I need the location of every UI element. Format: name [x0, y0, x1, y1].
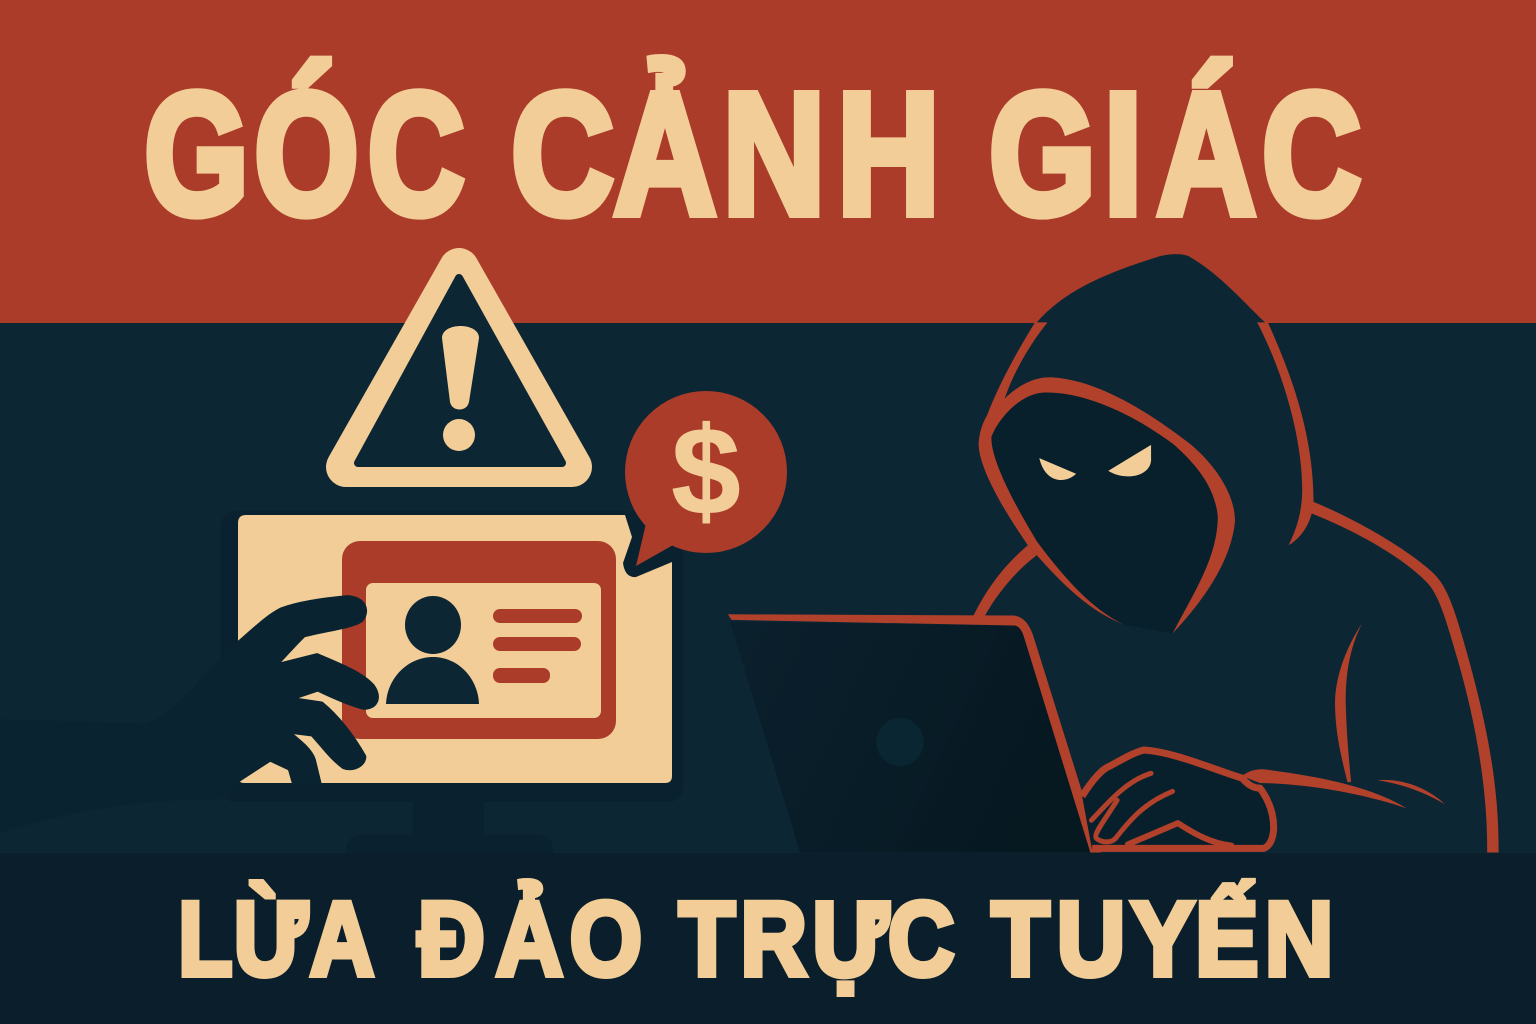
- shoulder and arm outline: [1311, 502, 1499, 852]
- subtitle: LỪA ĐẢO TRỰC TUYẾN: TRỰC: [679, 880, 954, 997]
- monitor with identity card: [221, 511, 683, 853]
- eyes: [1039, 458, 1076, 480]
- hood outline left: [980, 322, 1047, 441]
- title: GÓC CẢNH GIÁC: GIÁC: [989, 58, 1361, 251]
- title: GÓC CẢNH GIÁC: GÓC: [144, 57, 464, 250]
- subtitle: LỪA ĐẢO TRỰC TUYẾN: LỪA: [178, 880, 374, 998]
- background: red top band: [0, 0, 1536, 323]
- title: GÓC CẢNH GIÁC: [144, 57, 1361, 251]
- icon: warning triangle: [346, 268, 572, 467]
- neck and left shoulder outline: [974, 545, 1037, 615]
- title: GÓC CẢNH GIÁC: CẢNH: [511, 57, 940, 251]
- red card frame: [342, 541, 616, 739]
- face opening outline: [979, 377, 1235, 634]
- monitor screen: [238, 515, 672, 783]
- hood outline right: [1257, 322, 1314, 545]
- background: dark bottom band: [0, 853, 1536, 1024]
- card text lines: [493, 609, 582, 683]
- sleeve fold: [1335, 624, 1362, 782]
- subtitle: LỪA ĐẢO TRỰC TUYẾN: [178, 880, 1333, 998]
- avatar head: [405, 596, 461, 654]
- icon: dollar speech bubble: $: [672, 403, 740, 541]
- face shadow: [991, 390, 1219, 634]
- hacker hand on keyboard: [1082, 750, 1406, 850]
- icon: dollar speech bubble: [625, 391, 787, 566]
- hacker figure: [728, 254, 1499, 852]
- sleeve crease: [1377, 780, 1445, 804]
- background: navy middle band: [0, 323, 1536, 854]
- identity card: [366, 583, 601, 718]
- subtitle: LỪA ĐẢO TRỰC TUYẾN: ĐẢO: [418, 881, 642, 998]
- avatar body: [386, 657, 479, 704]
- hood silhouette: [1005, 254, 1314, 561]
- subtitle: LỪA ĐẢO TRỰC TUYẾN: TUYẾN: [991, 881, 1333, 998]
- monitor stand: [346, 800, 553, 853]
- scammer hand reaching into monitor: [0, 598, 376, 830]
- monitor bezel: [221, 511, 683, 802]
- laptop: [728, 614, 1101, 852]
